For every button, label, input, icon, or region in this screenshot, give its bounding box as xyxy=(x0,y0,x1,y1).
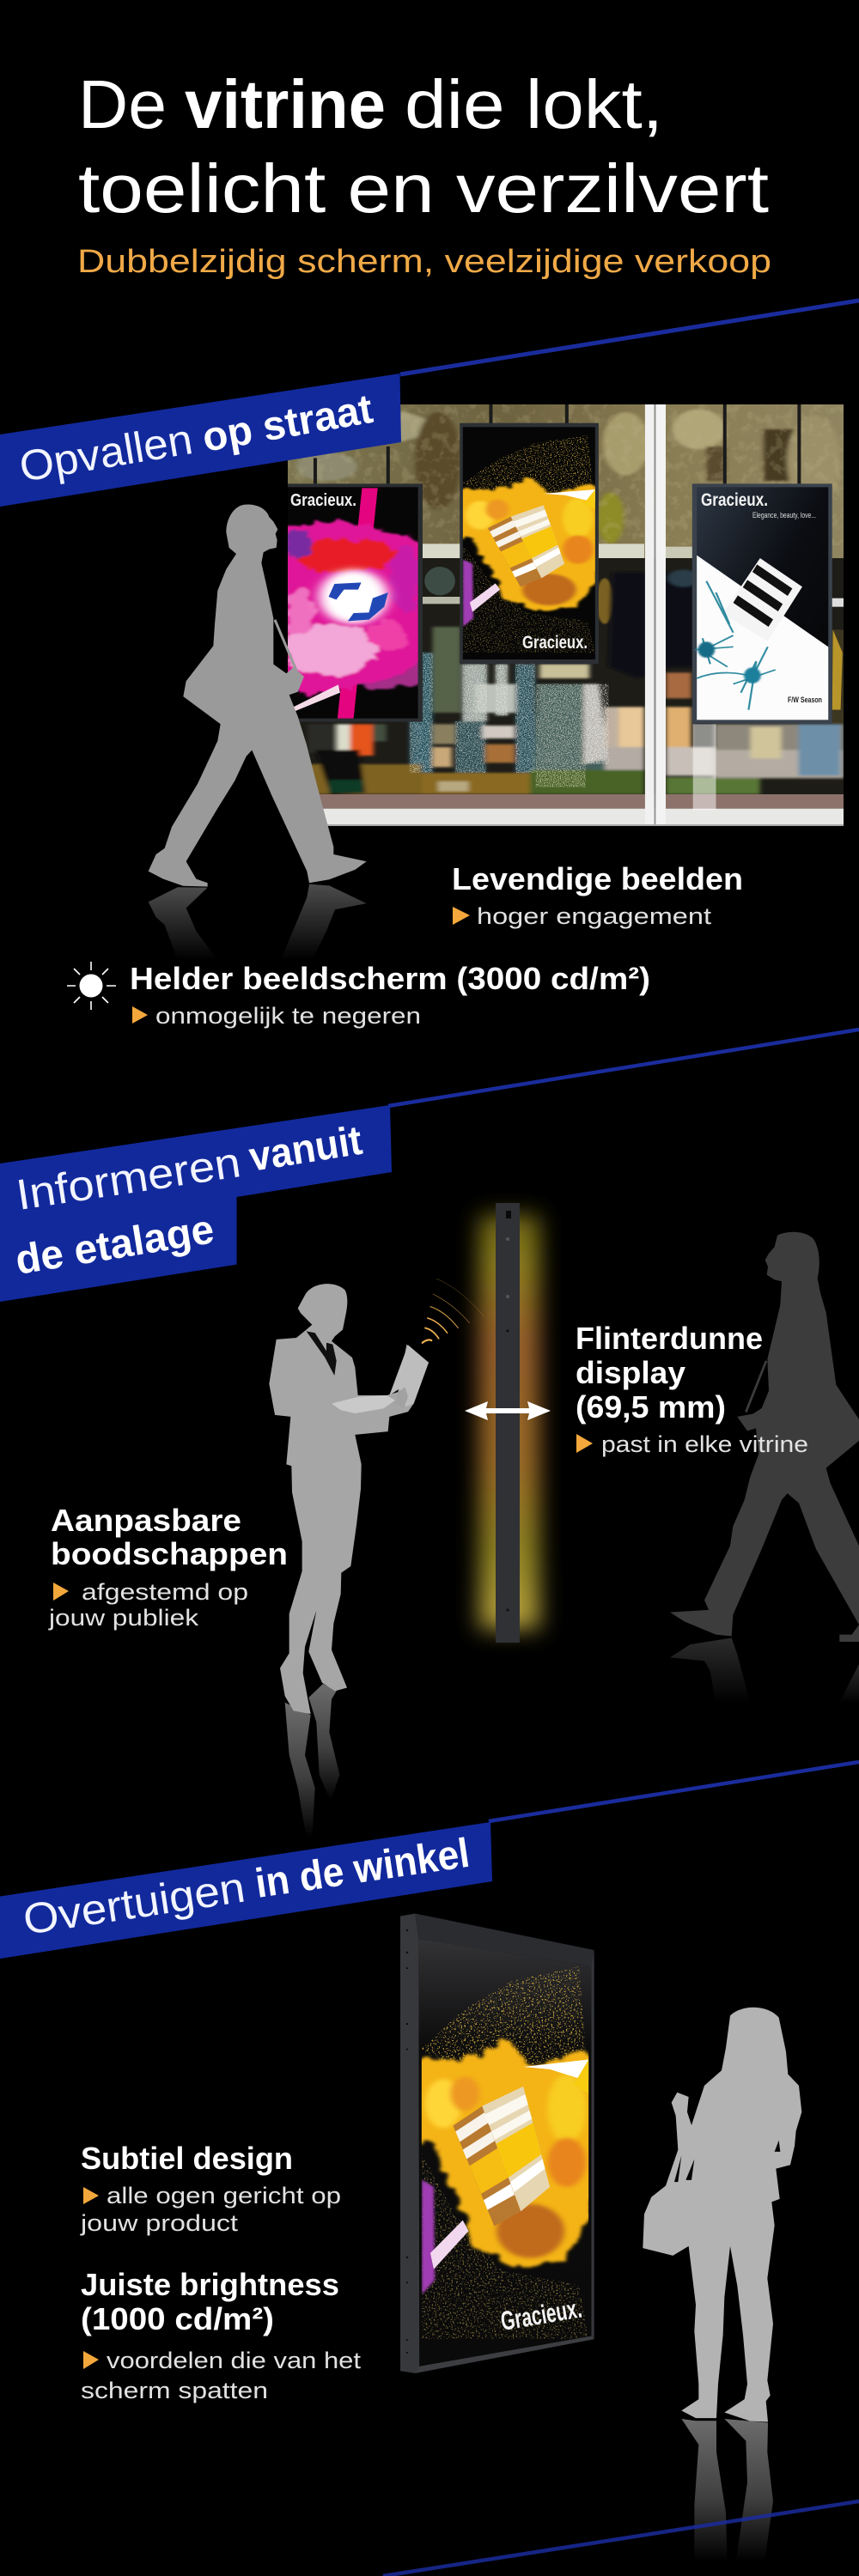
poster brand labels: Gracieux. xyxy=(701,490,768,510)
section 1 ribbon xyxy=(0,374,401,507)
callout: juiste brightness: (1000 cd/m²) xyxy=(81,2301,274,2336)
section 2 ribbon: vanuit xyxy=(246,1118,365,1181)
section 3 divider line xyxy=(489,1762,859,1821)
middle poster xyxy=(455,423,601,664)
silhouette: woman with laptop xyxy=(269,1284,429,1838)
icon: double arrow width xyxy=(465,1401,551,1420)
section 1 divider line xyxy=(400,301,859,374)
title xyxy=(78,66,769,227)
title: De xyxy=(78,66,167,143)
pavement and sill xyxy=(284,794,849,809)
section 1 ribbon: Opvallen xyxy=(16,415,196,491)
callout: juiste brightness xyxy=(81,2267,362,2403)
product: display in perspective: Gracieux. xyxy=(498,2293,584,2336)
callout: flinterdunne display: (69,5 mm) xyxy=(576,1389,726,1425)
section 1 ribbon: op straat xyxy=(199,386,376,461)
right poster xyxy=(692,483,832,724)
callout: juiste brightness: voordelen die van het xyxy=(107,2348,362,2373)
photo background: store interior xyxy=(284,558,849,796)
callout: flinterdunne display xyxy=(576,1321,808,1457)
icon: sun xyxy=(67,962,116,1010)
subtitle: Dubbelzijdig scherm, veelzijdige verkoop xyxy=(77,244,771,280)
section 3 ribbon: in de winkel xyxy=(253,1831,472,1907)
callout: subtiel design: alle ogen gericht op xyxy=(107,2183,341,2208)
section 2 ribbon: Informeren xyxy=(13,1138,244,1219)
product: display in perspective xyxy=(400,1913,596,2373)
callout: aanpasbare boodschappen: boodschappen xyxy=(51,1536,288,1571)
callout: helder beeldscherm xyxy=(130,961,650,1029)
poster brand labels xyxy=(290,490,822,704)
callout: flinterdunne display: Flinterdunne xyxy=(576,1321,763,1356)
callout: helder beeldscherm: onmogelijk te negeren xyxy=(155,1003,421,1029)
poster brand labels: Gracieux. xyxy=(522,633,588,653)
section 2 divider line xyxy=(388,1030,859,1106)
callout: flinterdunne display: past in elke vitrine xyxy=(601,1431,808,1457)
title: toelicht en verzilvert xyxy=(78,150,769,227)
callout: aanpasbare boodschappen: Aanpasbare xyxy=(51,1503,241,1538)
callout: helder beeldscherm: Helder beeldscherm (3000 cd/m²) xyxy=(130,961,650,996)
callout: subtiel design xyxy=(80,2141,341,2236)
callout: juiste brightness: Juiste brightness xyxy=(81,2267,339,2302)
title: vitrine xyxy=(185,66,386,143)
thin display: side view with glow xyxy=(479,1203,539,1643)
callout: aanpasbare boodschappen: afgestemd op xyxy=(82,1579,248,1605)
silhouette: walking man, dark xyxy=(670,1232,859,1704)
window mullions xyxy=(693,724,716,810)
photo background: street reflections xyxy=(284,402,849,562)
poster brand labels: Elegance, beauty, love... xyxy=(752,511,816,519)
poster brand labels: Gracieux. xyxy=(290,491,356,510)
silhouette: walking man with bag xyxy=(149,505,367,960)
callout: aanpasbare boodschappen xyxy=(48,1503,288,1631)
shop window photo xyxy=(277,402,849,826)
section 2 ribbon xyxy=(0,1105,392,1302)
callout: subtiel design: jouw product xyxy=(80,2210,239,2236)
patterned garments xyxy=(410,653,608,787)
callout: flinterdunne display: display xyxy=(576,1355,685,1390)
callout: levendige beelden: hoger engagement xyxy=(477,903,712,929)
callout: juiste brightness: scherm spatten xyxy=(81,2378,268,2403)
section 3 ribbon xyxy=(0,1822,492,1959)
callout: levendige beelden: Levendige beelden xyxy=(452,861,743,896)
section 2 ribbon: de etalage xyxy=(12,1206,217,1284)
silhouette: standing woman with handbag xyxy=(643,2008,801,2561)
section 3 ribbon: Overtuigen xyxy=(20,1863,248,1944)
poster brand labels: F/W Season xyxy=(788,696,822,704)
callout: subtiel design: Subtiel design xyxy=(81,2141,293,2176)
hanging cables xyxy=(315,402,799,483)
callout: levendige beelden xyxy=(452,861,743,929)
bottom divider line xyxy=(383,2501,859,2576)
callout: aanpasbare boodschappen: jouw publiek xyxy=(48,1605,199,1631)
clothes xyxy=(308,569,844,794)
left poster xyxy=(288,483,423,722)
icon: wifi signal arcs xyxy=(423,1279,484,1343)
title: die lokt, xyxy=(405,66,663,143)
